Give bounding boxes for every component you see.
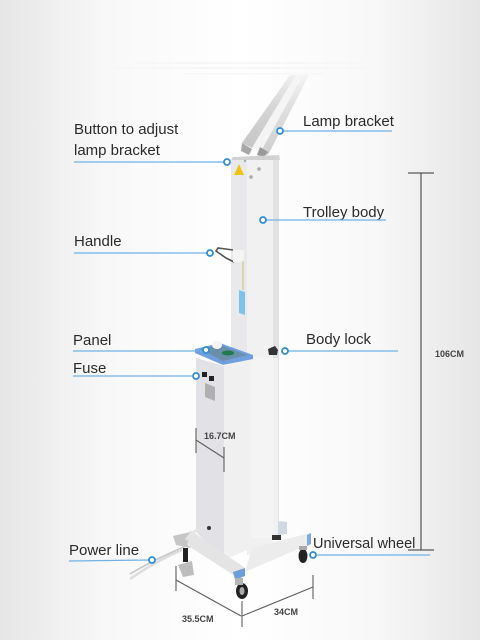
callout: button to adjust lamp bracket: lamp bracket (74, 142, 161, 159)
icon: power line and plug (130, 526, 211, 579)
icon: lower cabinet (196, 358, 278, 560)
icon: fuse holders (202, 372, 207, 377)
icon: control panel (195, 341, 253, 365)
dimension: 16.7CM: 16.7CM (204, 431, 236, 441)
icon: base and wheels (173, 521, 311, 599)
icon: body lock (268, 346, 278, 355)
callout: handle (74, 233, 213, 256)
icon: front wheel (236, 583, 248, 599)
icon: trolley column upper (231, 155, 280, 555)
icon: lamp bracket arms (241, 75, 309, 157)
faint caption lines (108, 62, 378, 74)
callout: panel: Panel (73, 332, 111, 349)
callout: button to adjust lamp bracket: Button to adjust (74, 121, 179, 138)
dimension: 16.7CM (196, 428, 236, 472)
callout: trolley body: Trolley body (303, 204, 385, 221)
icon: warning triangle (234, 164, 244, 175)
dimension: 34CM (242, 575, 313, 627)
callout: panel (73, 332, 209, 353)
callout: body lock: Body lock (306, 331, 372, 348)
dimension: 35.5CM (176, 566, 241, 624)
callout: power line (69, 542, 155, 563)
icon: blue tag (239, 290, 245, 315)
callout: trolley body (260, 204, 386, 223)
icon: label plate (205, 383, 215, 401)
callout: lamp bracket: Lamp bracket (303, 113, 395, 130)
dimension: 106CM: 106CM (435, 349, 464, 359)
callout: handle: Handle (74, 233, 122, 250)
callout: button to adjust lamp bracket (74, 121, 230, 165)
icon: rear wheel (298, 549, 308, 563)
callout: power line: Power line (69, 542, 139, 559)
callout: fuse: Fuse (73, 360, 106, 377)
dimension: 35.5CM: 35.5CM (182, 614, 214, 624)
icon: left caster (183, 548, 188, 562)
callout: fuse (73, 360, 199, 379)
callout: universal wheel (310, 536, 430, 558)
dimension: 34CM: 34CM (274, 607, 298, 617)
icon: handle (216, 248, 244, 290)
callout: lamp bracket (277, 113, 395, 134)
callout: body lock (282, 331, 398, 354)
callout: universal wheel: Universal wheel (313, 536, 415, 552)
